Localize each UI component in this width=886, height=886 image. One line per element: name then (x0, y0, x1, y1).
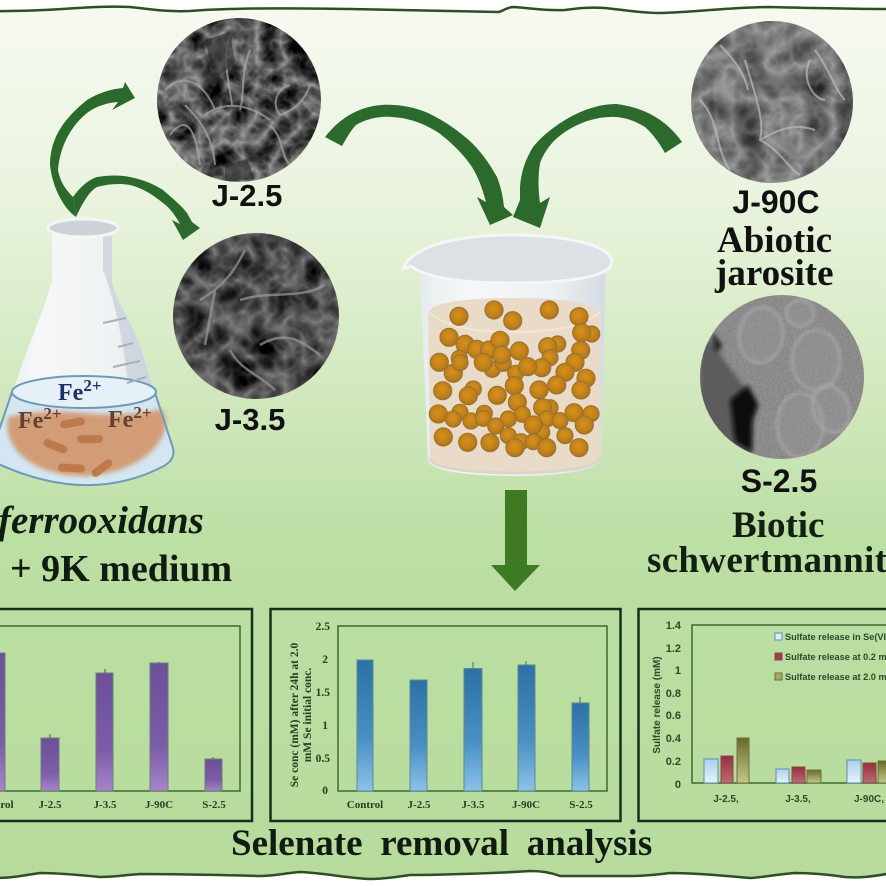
x axis labels: rol (0, 799, 14, 811)
y tick labels: 1 (322, 720, 328, 732)
y tick labels (316, 621, 330, 797)
bars (0, 653, 222, 791)
label: Fe2+ top: Fe (58, 380, 83, 406)
y tick labels: 2.5 (316, 621, 330, 633)
SEM image: J-90C (691, 21, 853, 183)
y axis title: Sulfate release (mM) (652, 656, 663, 754)
y tick labels: 0 (322, 785, 328, 797)
label: Abiotic jarosite: jarosite (714, 253, 834, 294)
label: Fe2+ left: Fe (18, 408, 43, 434)
x axis labels: J-90C, (854, 794, 884, 805)
y axis title: Se conc (mM) after 24h at 2.0 (289, 643, 301, 787)
SEM image: J-2.5 (157, 18, 321, 182)
x axis labels: J-3.5 (94, 799, 117, 811)
heading: Selenate removal analysis: Selenate removal analysis (231, 823, 652, 864)
x axis labels: J-2.5 (39, 799, 62, 811)
panel: chart right (sulfate release) (638, 609, 886, 821)
x axis labels: J-3.5 (462, 799, 485, 811)
arrow: J-2.5 to beaker (325, 105, 513, 225)
x axis labels: J-2.5, (713, 794, 739, 805)
y tick labels: 2 (322, 654, 328, 666)
label: J-90C: J-90C (732, 184, 820, 220)
SEM image: S-2.5 (700, 295, 864, 462)
grouped bars (704, 738, 886, 783)
label: S-2.5: S-2.5 (741, 463, 817, 499)
arrow: J-90C to beaker (513, 104, 682, 228)
x axis labels: S-2.5 (569, 799, 593, 811)
beaker with orange particles (403, 235, 612, 476)
x axis labels: J-90C (512, 799, 540, 811)
y tick labels: 1 (675, 665, 681, 677)
y tick labels: 0.4 (666, 733, 682, 745)
panel: chart left (purple bars) (0, 609, 252, 821)
x axis labels: Control (347, 799, 383, 811)
label: Fe2+ top: 2+ (83, 376, 102, 395)
bars (357, 660, 589, 791)
x axis labels: S-2.5 (202, 799, 226, 811)
particles (429, 301, 600, 457)
y axis title: mM Se initial conc. (302, 668, 314, 762)
x axis labels: J-3.5, (785, 794, 811, 805)
label: J-2.5: J-2.5 (212, 178, 282, 213)
x axis labels (713, 794, 884, 805)
label: Fe2+ right: Fe (108, 407, 133, 433)
x axis labels: J-90C (145, 799, 173, 811)
label: Fe2+ right: 2+ (133, 403, 152, 422)
label: J-3.5: J-3.5 (215, 402, 285, 437)
label: Biotic schwertmannite (647, 505, 886, 581)
arrow: flask to J-3.5 (73, 176, 200, 240)
arrow: beaker down to charts (491, 490, 540, 591)
y tick labels: 1.5 (316, 687, 330, 699)
label: Abiotic jarosite: Abiotic (717, 220, 832, 261)
x axis labels (0, 799, 226, 811)
y tick labels: 0.8 (666, 688, 681, 700)
y axis title (289, 643, 314, 787)
SEM image: J-3.5 (173, 233, 339, 399)
y tick labels (666, 620, 682, 791)
flask: Erlenmeyer with bacteria and Fe2+ (0, 219, 174, 485)
y tick labels: 0.5 (316, 753, 330, 765)
label: Biotic schwertmannite: Biotic (732, 505, 824, 546)
label: Abiotic jarosite (714, 220, 834, 294)
x axis labels (347, 799, 593, 811)
arrow: flask to J-2.5 (50, 82, 135, 217)
x axis labels: J-2.5 (408, 799, 431, 811)
y tick labels: 0.2 (666, 756, 681, 768)
y tick labels: 1.4 (666, 620, 682, 632)
label: Fe2+ left: 2+ (43, 404, 62, 423)
label: ferrooxidans: ferrooxidans (0, 499, 204, 542)
y tick labels: 1.2 (666, 643, 681, 655)
panel: chart middle (blue bars) (270, 609, 620, 821)
y tick labels: 0.6 (666, 710, 681, 722)
y tick labels: 0 (675, 779, 681, 791)
legend (775, 632, 886, 682)
label: + 9K medium: + 9K medium (10, 548, 232, 590)
